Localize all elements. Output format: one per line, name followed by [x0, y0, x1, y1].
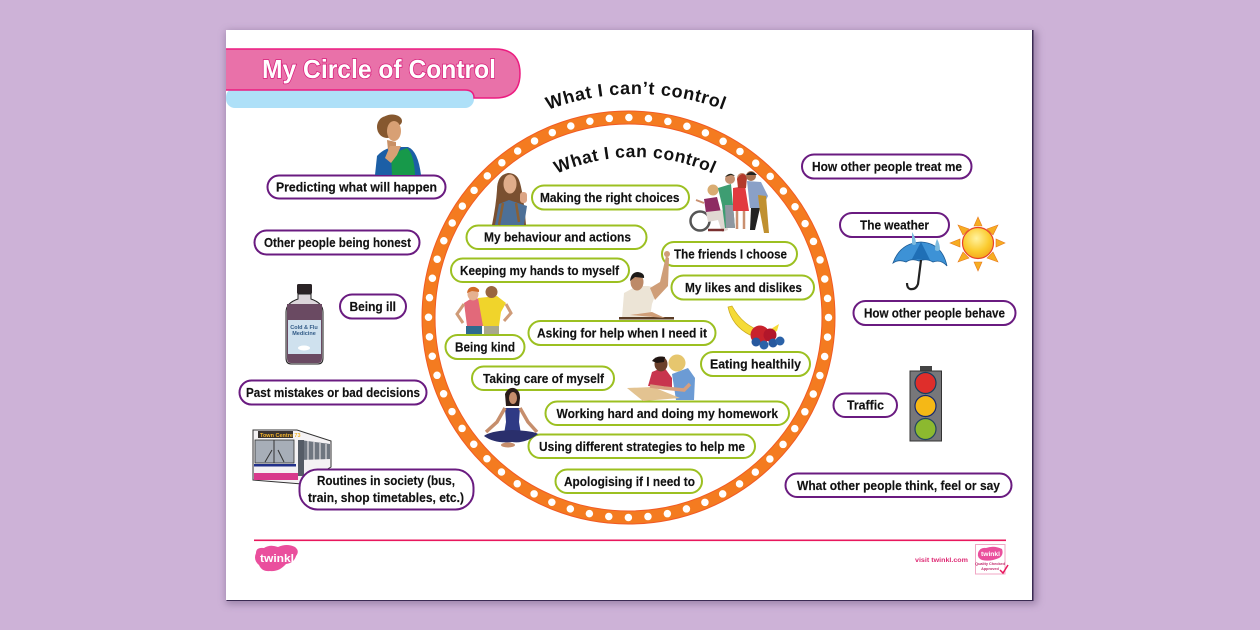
title text: My Circle of Control	[262, 54, 496, 84]
label: being ill	[340, 294, 406, 318]
worksheet page	[226, 30, 1037, 604]
label: taking care: Taking care of myself	[483, 372, 605, 386]
label: friends	[662, 242, 797, 266]
icon: thinking person	[375, 114, 421, 175]
label: likes	[672, 276, 814, 300]
label: right choices: Making the right choices	[540, 191, 680, 205]
label: predicting	[268, 176, 446, 198]
footer link: visit twinkl.com	[915, 557, 968, 564]
label: past mistakes: Past mistakes or bad decisions	[246, 386, 420, 400]
label: being kind	[446, 335, 524, 359]
label: what others think	[786, 474, 1012, 497]
icon: umbrella	[893, 232, 947, 289]
label: behave: How other people behave	[864, 306, 1005, 320]
icon: two friends	[457, 286, 511, 334]
icon: medicine bottle: Cold & Flu	[290, 325, 318, 331]
label: being ill: Being ill	[350, 300, 396, 314]
label: treat me	[802, 154, 972, 178]
label: honest: Other people being honest	[264, 236, 412, 250]
icon: bus: Town Centre 73	[260, 433, 301, 439]
icon: medicine bottle: Medicine	[292, 331, 316, 337]
label: what others think: What other people think, feel or say	[797, 479, 1000, 493]
label: traffic: Traffic	[847, 398, 884, 412]
quality badge: twinkl	[981, 551, 1000, 558]
twinkl logo: twinkl	[260, 553, 294, 565]
quality badge	[975, 544, 1008, 574]
label: apologising: Apologising if I need to	[564, 475, 695, 489]
label: hands: Keeping my hands to myself	[460, 264, 620, 278]
icon: group of friends with wheelchair	[690, 171, 769, 233]
twinkl logo	[255, 545, 298, 571]
label: behave	[854, 301, 1016, 325]
icon: boy raising hand	[619, 251, 674, 320]
label: likes: My likes and dislikes	[685, 281, 802, 295]
label: friends: The friends I choose	[674, 248, 787, 262]
icon: children studying	[627, 354, 695, 401]
label: taking care	[472, 366, 614, 390]
icon: traffic light	[910, 366, 942, 441]
icon: medicine bottle	[286, 284, 323, 364]
quality badge: Approved	[981, 567, 1000, 571]
icon: girl with thumbs up	[492, 173, 527, 225]
label: homework	[546, 402, 789, 425]
label: eating: Eating healthily	[710, 358, 801, 372]
label: apologising	[556, 470, 702, 493]
label: strategies	[528, 434, 755, 458]
icon: sun	[950, 217, 1005, 271]
panel: things I can control	[446, 186, 814, 493]
label: hands	[451, 258, 629, 282]
label: behaviour: My behaviour and actions	[484, 230, 631, 244]
heading: what I can't control: What I can’t control	[544, 82, 726, 110]
icon: person meditating	[484, 388, 538, 448]
panel: things I can't control, right	[786, 154, 1016, 497]
label: predicting: Predicting what will happen	[276, 180, 437, 194]
label: weather: The weather	[860, 218, 929, 232]
label: behaviour	[466, 226, 646, 249]
label: routines: Routines in society (bus,	[317, 474, 455, 488]
circle of control ring	[422, 111, 835, 524]
heading: what I can control: What I can control	[552, 146, 717, 173]
label: eating	[701, 352, 810, 376]
label: strategies: Using different strategies to help me	[539, 440, 745, 454]
icon: bus	[253, 430, 331, 484]
label: asking for help: Asking for help when I need it	[537, 326, 708, 340]
label: homework: Working hard and doing my homework	[556, 407, 778, 421]
panel: things I can't control, left	[240, 176, 446, 404]
label: right choices	[532, 186, 689, 210]
label: traffic	[834, 394, 897, 417]
label: weather	[840, 213, 949, 237]
label: asking for help	[528, 321, 716, 345]
footer divider	[254, 540, 1006, 541]
label: routines: train, shop timetables, etc.)	[308, 491, 464, 505]
icon: fruit	[728, 306, 784, 350]
label: routines	[300, 470, 474, 510]
label: treat me: How other people treat me	[812, 160, 962, 174]
label: being kind: Being kind	[455, 340, 515, 354]
quality badge: Quality Checked	[975, 562, 1006, 566]
label: honest	[254, 230, 420, 254]
label: past mistakes	[240, 380, 426, 404]
title banner	[226, 49, 520, 108]
